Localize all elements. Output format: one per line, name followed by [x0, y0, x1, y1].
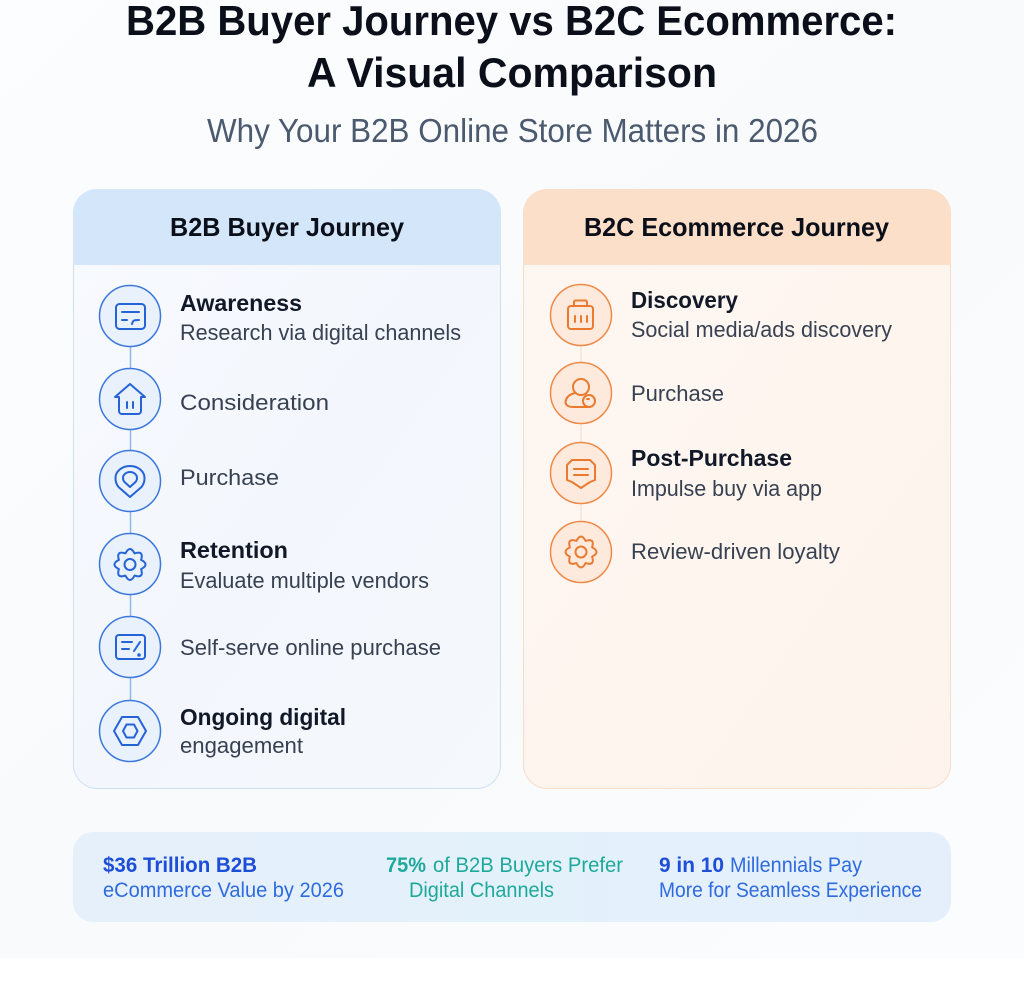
step: Ongoing digital engagement	[100, 700, 346, 762]
step: Self-serve: Self-serve online purchase	[180, 635, 441, 660]
step: Consideration	[100, 368, 329, 430]
step: Retention: Evaluate multiple vendors	[180, 568, 429, 593]
subtitle: Why Your B2B Online Store Matters in 2026	[207, 112, 818, 149]
stat: 75% digital channels: of B2B Buyers Prefer	[433, 854, 623, 877]
step: Ongoing digital engagement: engagement	[180, 733, 303, 758]
stat: $36 Trillion: $36 Trillion B2B	[103, 854, 257, 877]
timeline connector: B2C	[580, 345, 582, 525]
stat: 9 in 10 millennials: 9 in 10	[659, 854, 724, 877]
step: Retention	[100, 534, 429, 594]
stat: 75% digital channels: Digital Channels	[409, 879, 554, 902]
heading: B2B Buyer Journey: B2B Buyer Journey	[170, 212, 405, 242]
step: Retention: Retention	[180, 537, 288, 563]
step: Discovery	[550, 284, 892, 346]
stat: 9 in 10 millennials: Millennials Pay	[730, 854, 862, 877]
step: Ongoing digital engagement: Ongoing digital	[180, 704, 346, 730]
step: Post-Purchase: Impulse buy via app	[631, 476, 822, 501]
step: Consideration: Consideration	[180, 390, 329, 415]
step: Purchase	[550, 362, 724, 424]
step: Post-Purchase	[550, 442, 822, 504]
panel header: B2B	[73, 189, 501, 265]
stats bar	[73, 832, 951, 922]
title	[126, 0, 897, 96]
stat: 75% digital channels	[386, 854, 623, 902]
title: A Visual Comparison	[307, 49, 717, 96]
step: Purchase: Purchase	[631, 381, 724, 406]
step: Review-driven loyalty	[550, 522, 840, 582]
stat: $36 Trillion: eCommerce Value by 2026	[103, 879, 344, 902]
step: Post-Purchase: Post-Purchase	[631, 445, 792, 471]
stat: 9 in 10 millennials	[659, 854, 922, 902]
step: Awareness	[100, 286, 461, 346]
stat: 75% digital channels: 75%	[386, 854, 426, 877]
step: Purchase: Purchase	[180, 465, 279, 490]
stat: $36 Trillion	[103, 854, 344, 902]
panel header: B2C	[523, 189, 951, 265]
step: Self-serve	[100, 616, 441, 678]
heading: B2C Ecommerce Journey: B2C Ecommerce Journey	[584, 212, 890, 242]
timeline connector: B2B	[130, 347, 132, 700]
step: Awareness: Awareness	[180, 290, 302, 316]
stat: 9 in 10 millennials: More for Seamless Experience	[659, 879, 922, 902]
step: Purchase	[100, 450, 279, 512]
panel: B2B buyer journey	[73, 189, 501, 788]
step: Review-driven loyalty: Review-driven loyalty	[631, 539, 840, 564]
step: Discovery: Discovery	[631, 287, 738, 313]
panel: B2C ecommerce journey	[523, 189, 951, 788]
step: Awareness: Research via digital channels	[180, 320, 461, 345]
step: Discovery: Social media/ads discovery	[631, 317, 892, 342]
